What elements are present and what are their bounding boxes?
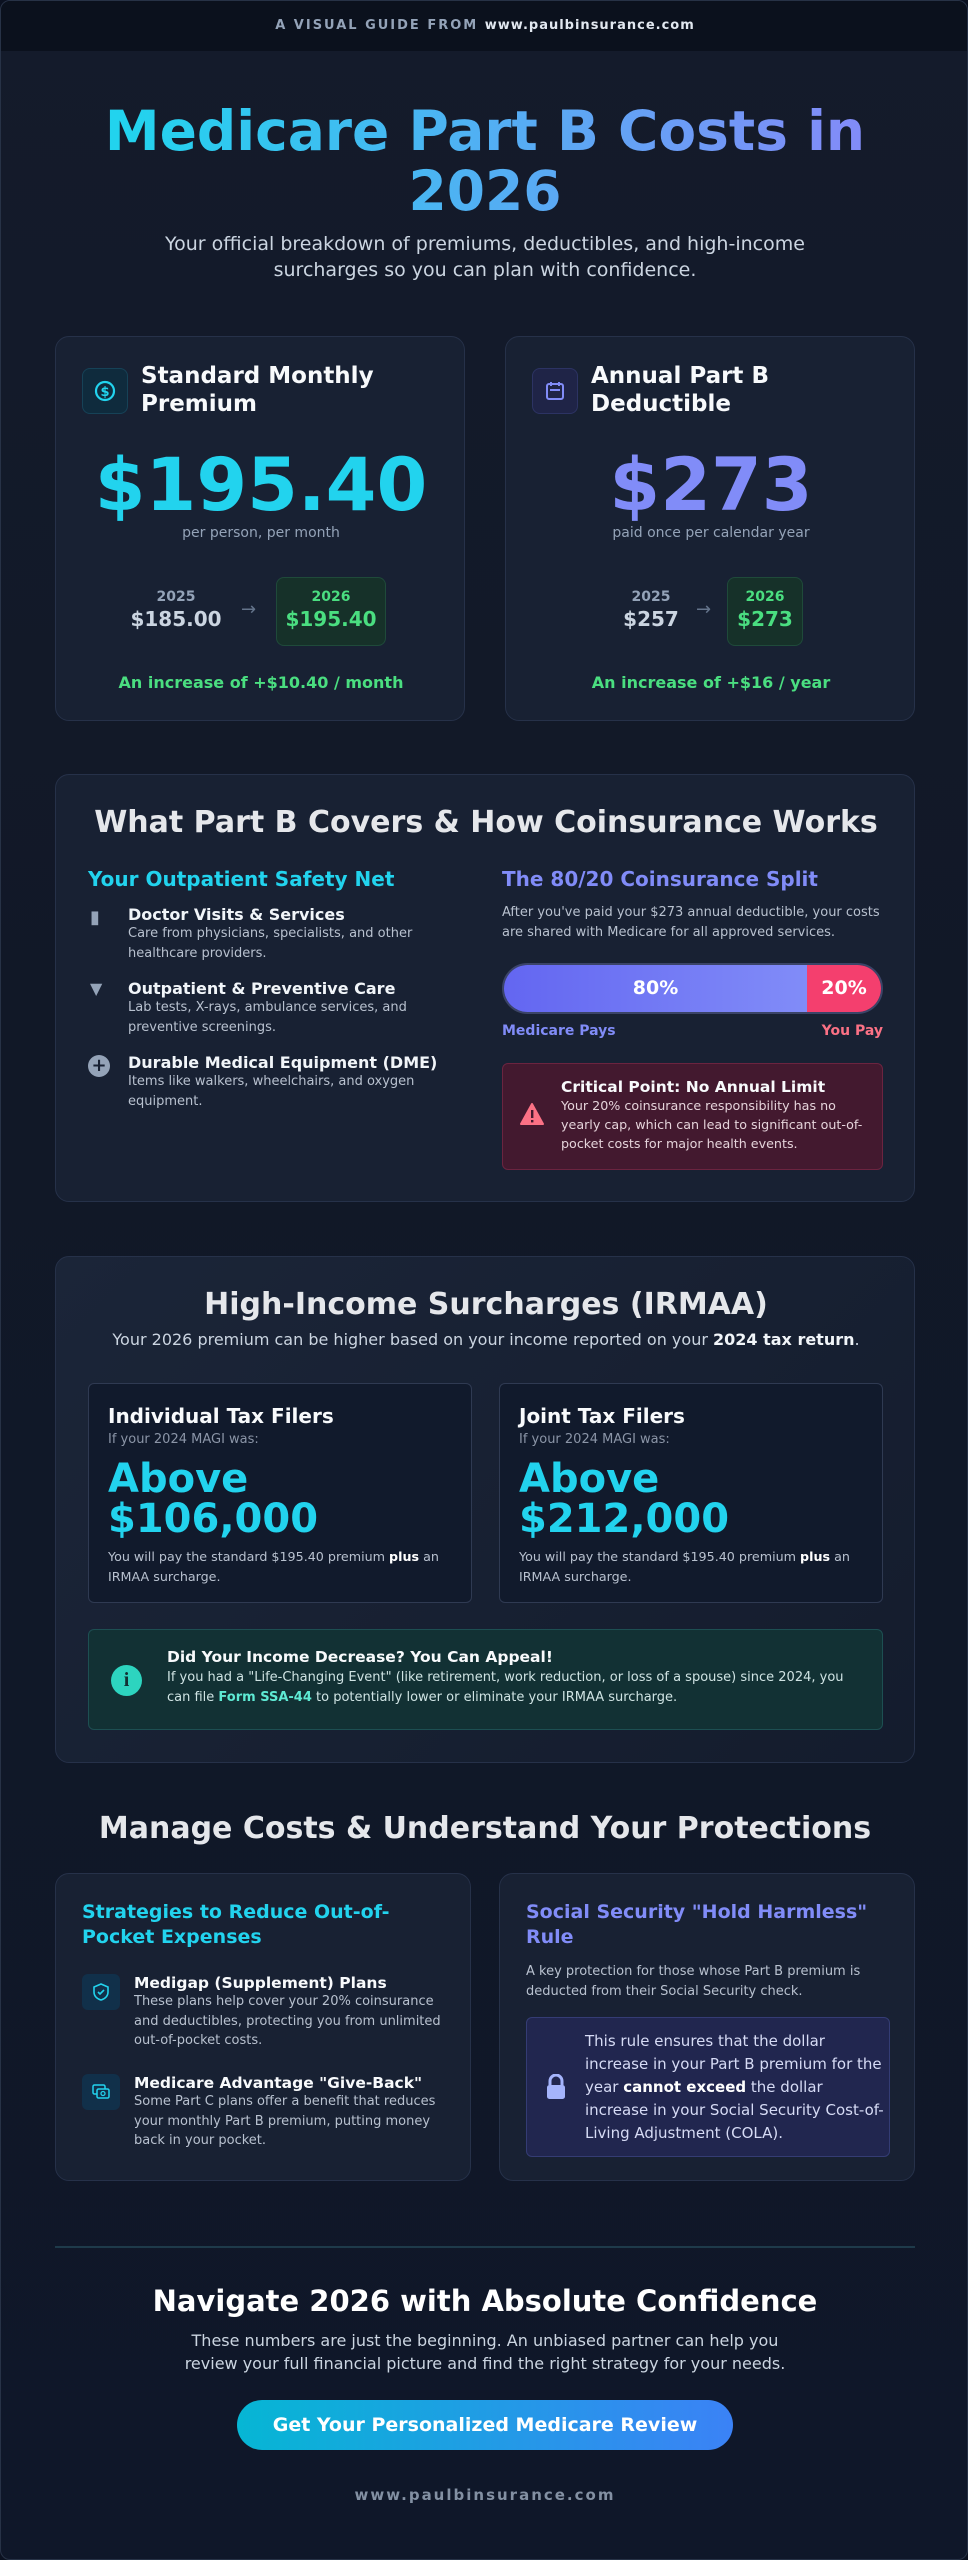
footer url: www.paulbinsurance.com xyxy=(355,2486,615,2504)
comparison 2025 -> 2026 xyxy=(130,577,386,646)
card: joint: If your 2024 MAGI was: xyxy=(519,1432,670,1447)
bar labels: You Pay xyxy=(822,1023,883,1039)
icon: dollar xyxy=(82,368,128,414)
big number: $195.40 xyxy=(95,443,427,528)
item: doctor visits xyxy=(90,905,412,961)
card: individual: $106,000 xyxy=(108,1496,318,1542)
item: DME xyxy=(88,1053,437,1109)
heading: manage costs: Manage Costs & Understand Your Protections xyxy=(99,1811,871,1846)
item: give-back: Some Part C plans offer a benefit that reduces your monthly Part B premium, putting money back in your pocket. xyxy=(134,2094,435,2148)
subheading: 80/20: The 80/20 Coinsurance Split xyxy=(502,867,818,891)
button: CTA xyxy=(237,2400,733,2450)
item: DME: Items like walkers, wheelchairs, and oxygen equipment. xyxy=(128,1074,414,1109)
callout: rule box: This rule ensures that the dollar increase in your Part B premium for the year cannot exceed the dollar increase in your Social Security Cost-of-Living Adjustment (COLA). xyxy=(585,2032,884,2142)
item: medigap: Medigap (Supplement) Plans xyxy=(134,1974,387,1992)
closing text: These numbers are just the beginning. An unbiased partner can help you review your full financial picture and find the right strategy for your needs. xyxy=(185,2331,785,2373)
top bar xyxy=(1,1,968,51)
increase note: An increase of +$16 / year xyxy=(592,673,830,692)
item: give-back: Medicare Advantage "Give-Back" xyxy=(134,2074,422,2092)
card: individual: If your 2024 MAGI was: xyxy=(108,1432,259,1447)
callout: rule box xyxy=(526,2017,890,2157)
icon: dollar: $ xyxy=(100,385,110,400)
card: individual: Above xyxy=(108,1456,248,1502)
item: medigap: These plans help cover your 20% coinsurance and deductibles, protecting you from unlimited out-of-pocket costs. xyxy=(134,1994,441,2048)
callout: appeal: If you had a "Life-Changing Event" (like retirement, work reduction, or loss of a spouse) since 2024, you can file Form SSA-44 to potentially lower or eliminate your IRMAA surcharge. xyxy=(167,1670,844,1705)
card: joint: Joint Tax Filers xyxy=(519,1404,685,1428)
comparison: 2026 xyxy=(746,589,784,605)
item: outpatient xyxy=(90,979,407,1035)
icon: info xyxy=(111,1665,142,1696)
subheading: safety net: Your Outpatient Safety Net xyxy=(88,867,394,891)
comparison: $273 xyxy=(737,607,793,631)
heading: What Part B Covers & How Coinsurance Works xyxy=(94,805,878,840)
panel: hold harmless xyxy=(499,1873,915,2181)
card title: Premium xyxy=(141,391,257,417)
callout: no annual limit: Critical Point: No Annual Limit xyxy=(561,1078,825,1096)
card: individual: Individual Tax Filers xyxy=(108,1404,334,1428)
title: 2026 xyxy=(408,159,562,223)
panel title: Strategies to Reduce Out-of-Pocket Expenses xyxy=(82,1901,390,1948)
panel: strategies xyxy=(55,1873,471,2181)
heading: navigate 2026: Navigate 2026 with Absolute Confidence xyxy=(153,2284,817,2318)
button: CTA: Get Your Personalized Medicare Review xyxy=(273,2414,697,2436)
comparison 2025 -> 2026: 2025 xyxy=(157,589,195,605)
comparison: → xyxy=(696,599,711,620)
item: DME: Durable Medical Equipment (DME) xyxy=(128,1053,437,1072)
panel title: Social Security "Hold Harmless" Rule xyxy=(526,1901,867,1948)
comparison 2025 -> 2026: $195.40 xyxy=(285,607,377,631)
comparison 2025 -> 2026: 2026 xyxy=(312,589,350,605)
title xyxy=(35,101,935,221)
card: joint: $212,000 xyxy=(519,1496,729,1542)
title: Medicare Part B Costs in xyxy=(105,99,865,163)
item: medigap xyxy=(82,1974,441,2048)
text: after deductible: After you've paid your $273 annual deductible, your costs are shared with Medicare for all approved services. xyxy=(502,905,880,940)
item: outpatient: Outpatient & Preventive Care xyxy=(128,979,395,998)
item: doctor visits: Doctor Visits & Services xyxy=(128,905,345,924)
callout: no annual limit xyxy=(502,1063,883,1170)
card title: Deductible xyxy=(591,391,731,417)
item: outpatient: ▼ xyxy=(90,979,102,998)
bar labels: Medicare Pays xyxy=(502,1023,616,1039)
card title: Annual Part B xyxy=(591,363,769,389)
item: doctor visits: Care from physicians, specialists, and other healthcare providers. xyxy=(128,926,412,961)
card: individual: You will pay the standard $195.40 premium plus an IRMAA surcharge. xyxy=(108,1549,439,1584)
panel: IRMAA xyxy=(55,1256,915,1763)
subtitle: Your official breakdown of premiums, deductibles, and high-income surcharges so you can plan with confidence. xyxy=(165,233,805,281)
bar chart: 80/20 xyxy=(502,963,883,1014)
increase note: An increase of +$10.40 / month xyxy=(119,673,403,692)
big number: $273 xyxy=(609,443,813,528)
panel: annual deductible xyxy=(505,336,915,721)
card: individual xyxy=(88,1383,472,1603)
subtext: Your 2026 premium can be higher based on your income reported on your 2024 tax return. xyxy=(112,1330,860,1349)
item: doctor visits: ▮ xyxy=(90,907,100,928)
top bar: A VISUAL GUIDE FROM www.paulbinsurance.com xyxy=(275,18,695,33)
bar labels xyxy=(502,1023,883,1039)
bar chart: 80/20: 20% xyxy=(821,977,867,999)
icon: shield xyxy=(82,1974,120,2010)
callout: appeal: Did Your Income Decrease? You Can Appeal! xyxy=(167,1648,553,1666)
comparison 2025 -> 2026: $185.00 xyxy=(130,607,222,631)
icon: lock xyxy=(547,2074,565,2099)
item: give-back xyxy=(82,2074,435,2148)
description: A key protection for those whose Part B premium is deducted from their Social Security check. xyxy=(526,1964,860,1999)
item: DME: + xyxy=(91,1055,107,1076)
comparison xyxy=(623,577,803,646)
card title xyxy=(591,363,769,417)
callout: appeal xyxy=(88,1629,883,1730)
icon: money xyxy=(82,2074,120,2110)
card: joint: Above xyxy=(519,1456,659,1502)
card: joint: You will pay the standard $195.40 premium plus an IRMAA surcharge. xyxy=(519,1549,850,1584)
heading: High-Income Surcharges (IRMAA) xyxy=(204,1287,768,1322)
card title xyxy=(141,363,374,417)
callout: no annual limit: Your 20% coinsurance responsibility has no yearly cap, which can lead to significant out-of-pocket costs for major health events. xyxy=(561,1098,862,1151)
item: outpatient: Lab tests, X-rays, ambulance services, and preventive screenings. xyxy=(128,1000,407,1035)
comparison: 2025 xyxy=(632,589,670,605)
card title: Standard Monthly xyxy=(141,363,374,389)
caption: paid once per calendar year xyxy=(612,525,810,541)
panel: coverage & coinsurance xyxy=(55,774,915,1202)
bar chart: 80/20: 80% xyxy=(633,977,678,999)
comparison: $257 xyxy=(623,607,679,631)
comparison 2025 -> 2026: → xyxy=(241,599,256,620)
icon: warning xyxy=(520,1103,544,1125)
icon: info: i xyxy=(124,1669,129,1691)
panel: standard monthly premium xyxy=(55,336,465,721)
caption: per person, per month xyxy=(182,525,340,541)
icon: calendar xyxy=(532,368,578,414)
card: joint xyxy=(499,1383,883,1603)
